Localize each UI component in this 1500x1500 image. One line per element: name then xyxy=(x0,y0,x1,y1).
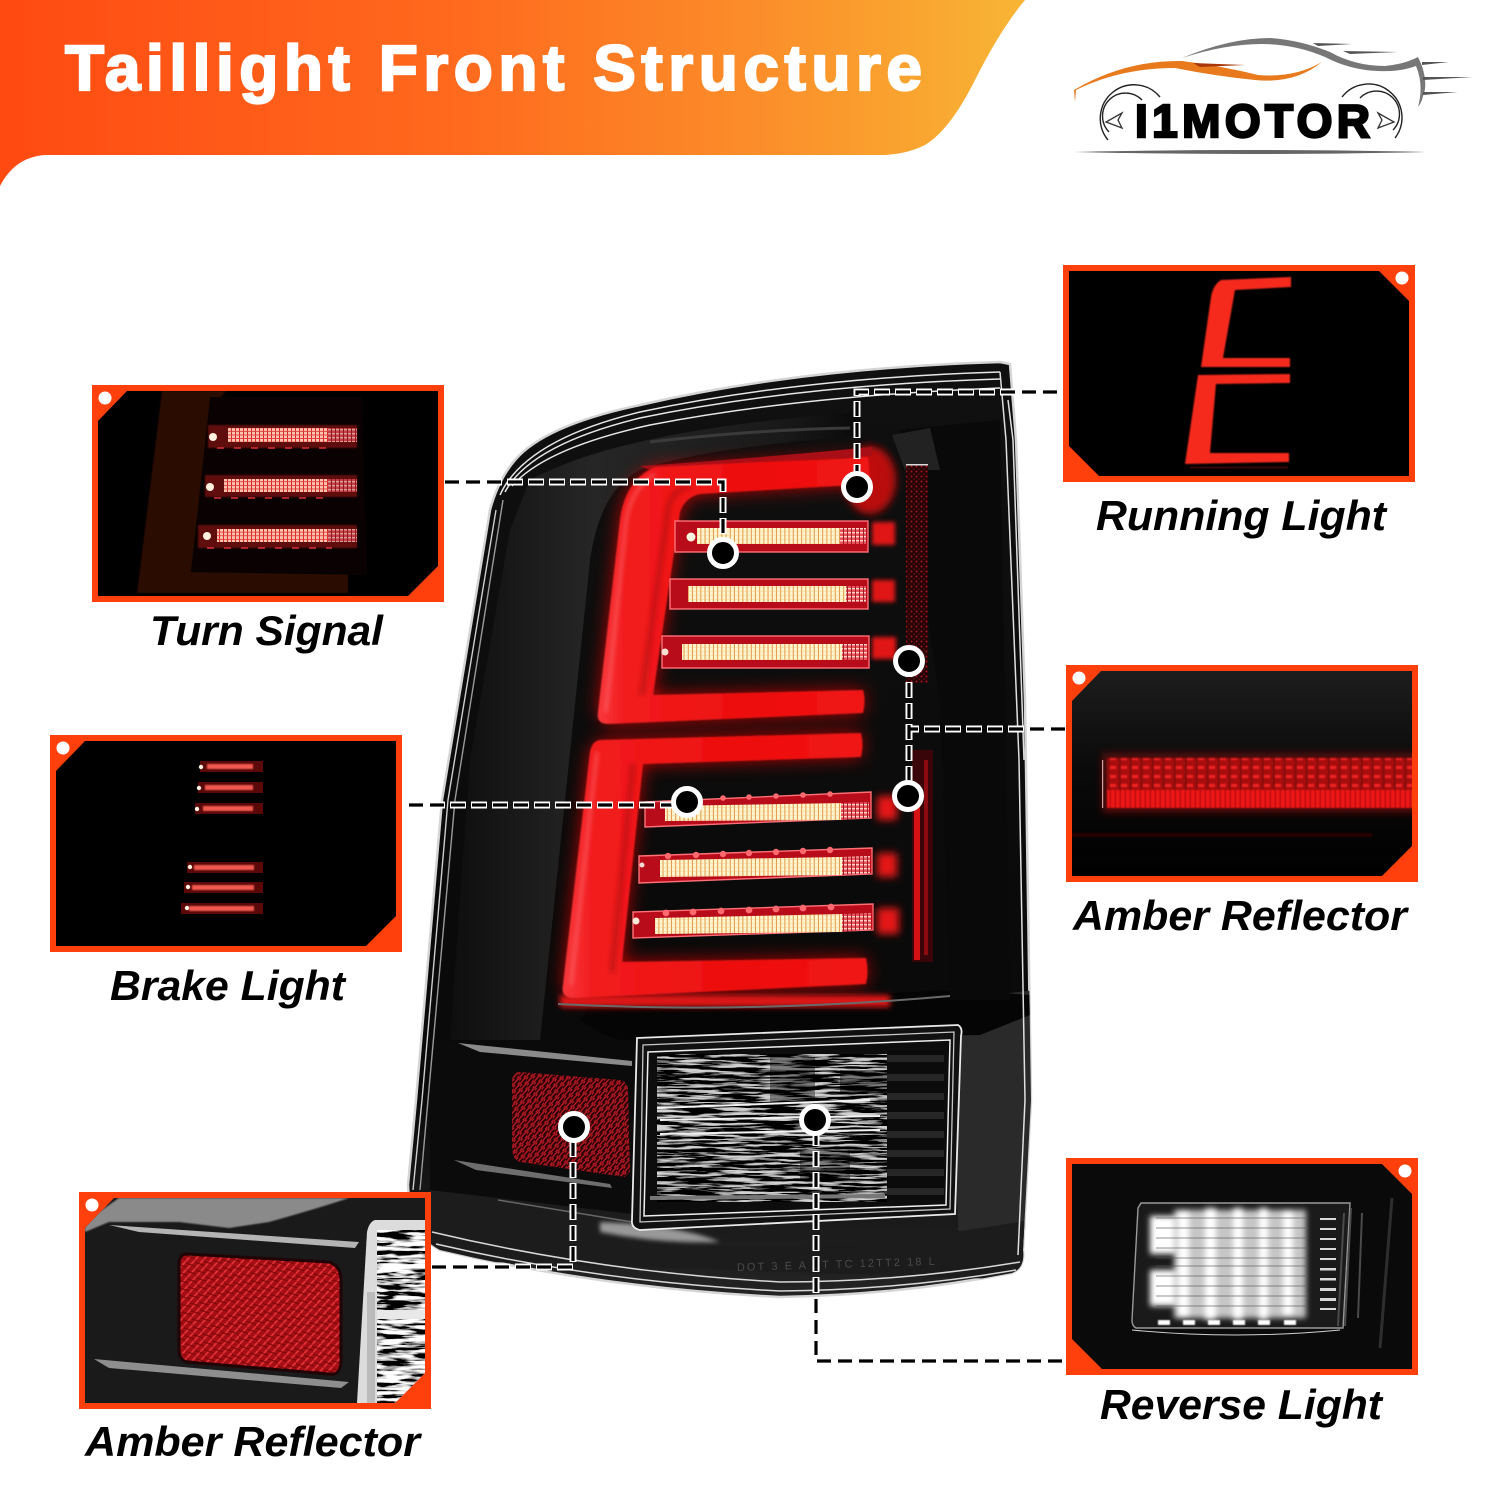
leader: brake light xyxy=(408,802,687,808)
side reflector upper xyxy=(906,464,928,683)
lamp housing xyxy=(408,362,1035,1297)
leader: turn signal xyxy=(444,482,723,553)
LED bar 1 xyxy=(208,425,357,448)
light blobs xyxy=(1150,1208,1306,1320)
chrome strip top xyxy=(109,1225,359,1248)
LED bar 2 xyxy=(205,475,357,498)
side red glows xyxy=(872,522,896,659)
callout dots xyxy=(560,474,922,1140)
strip 6 xyxy=(632,904,873,938)
leader: left amber reflector xyxy=(431,1127,573,1267)
side reflector lower xyxy=(912,750,933,962)
bottom sparkle row xyxy=(1158,1320,1296,1325)
strip 3 xyxy=(662,636,869,668)
chrome strip bottom xyxy=(94,1359,349,1388)
header banner xyxy=(0,0,1025,186)
strip 2 xyxy=(670,579,868,609)
panel: reverse light xyxy=(1066,1158,1418,1375)
title: Taillight Front Structure xyxy=(65,32,922,104)
rib section xyxy=(887,1050,944,1200)
label: amber reflector right: Amber Reflector xyxy=(1072,892,1410,939)
taillight assembly xyxy=(408,362,1035,1297)
dim E tube xyxy=(137,391,348,593)
right ribs xyxy=(1320,1218,1336,1310)
panel: turn signal xyxy=(92,385,444,602)
logo car swoosh xyxy=(1074,38,1473,154)
panel: amber reflector right xyxy=(1066,665,1418,882)
ledge under tubes xyxy=(558,996,950,1008)
reflector lens on lamp xyxy=(454,1043,632,1222)
LED bar 3 xyxy=(198,525,357,548)
gloss xyxy=(85,1198,349,1232)
panel: brake light xyxy=(50,735,402,952)
lens body xyxy=(1132,1203,1350,1328)
label: running light: Running Light xyxy=(1096,492,1388,539)
prism texture xyxy=(657,1054,887,1202)
running light E shape xyxy=(1185,277,1291,468)
LED strips upper group xyxy=(662,521,896,668)
logo wordmark: I1MOTOR xyxy=(1135,95,1370,147)
leader: right amber reflector xyxy=(909,661,1066,796)
leader: running light xyxy=(857,392,1058,487)
strip 1 xyxy=(675,521,868,552)
panel: running light xyxy=(1063,265,1415,482)
lower E light tube xyxy=(562,733,868,998)
red glow behind light tubes xyxy=(560,446,896,1007)
reflector xyxy=(179,1254,341,1374)
side red glows lower xyxy=(877,796,899,934)
strip 4 xyxy=(645,791,871,827)
chrome rim xyxy=(500,372,1000,495)
label: brake light: Brake Light xyxy=(110,962,347,1009)
panel: amber reflector left xyxy=(79,1192,431,1409)
embossed marking: DOT 3 E A ST TC 12TT2 18 L xyxy=(737,1256,935,1274)
label: reverse light: Reverse Light xyxy=(1100,1381,1384,1428)
brake bars xyxy=(181,761,263,914)
horizontal flutes xyxy=(1156,1218,1306,1306)
glowing reflector band xyxy=(1102,753,1418,813)
logo: I1MOTOR xyxy=(1074,38,1473,154)
label: amber reflector left: Amber Reflector xyxy=(84,1418,423,1465)
upper E light tube xyxy=(598,447,872,724)
chrome strips xyxy=(458,1043,632,1066)
label: turn signal: Turn Signal xyxy=(150,607,384,654)
leader: reverse light xyxy=(816,1120,1063,1361)
clear lens edge xyxy=(357,1220,431,1403)
strip 5 xyxy=(639,847,872,883)
reverse light lens xyxy=(632,1025,962,1230)
LED strips lower group xyxy=(632,791,899,938)
